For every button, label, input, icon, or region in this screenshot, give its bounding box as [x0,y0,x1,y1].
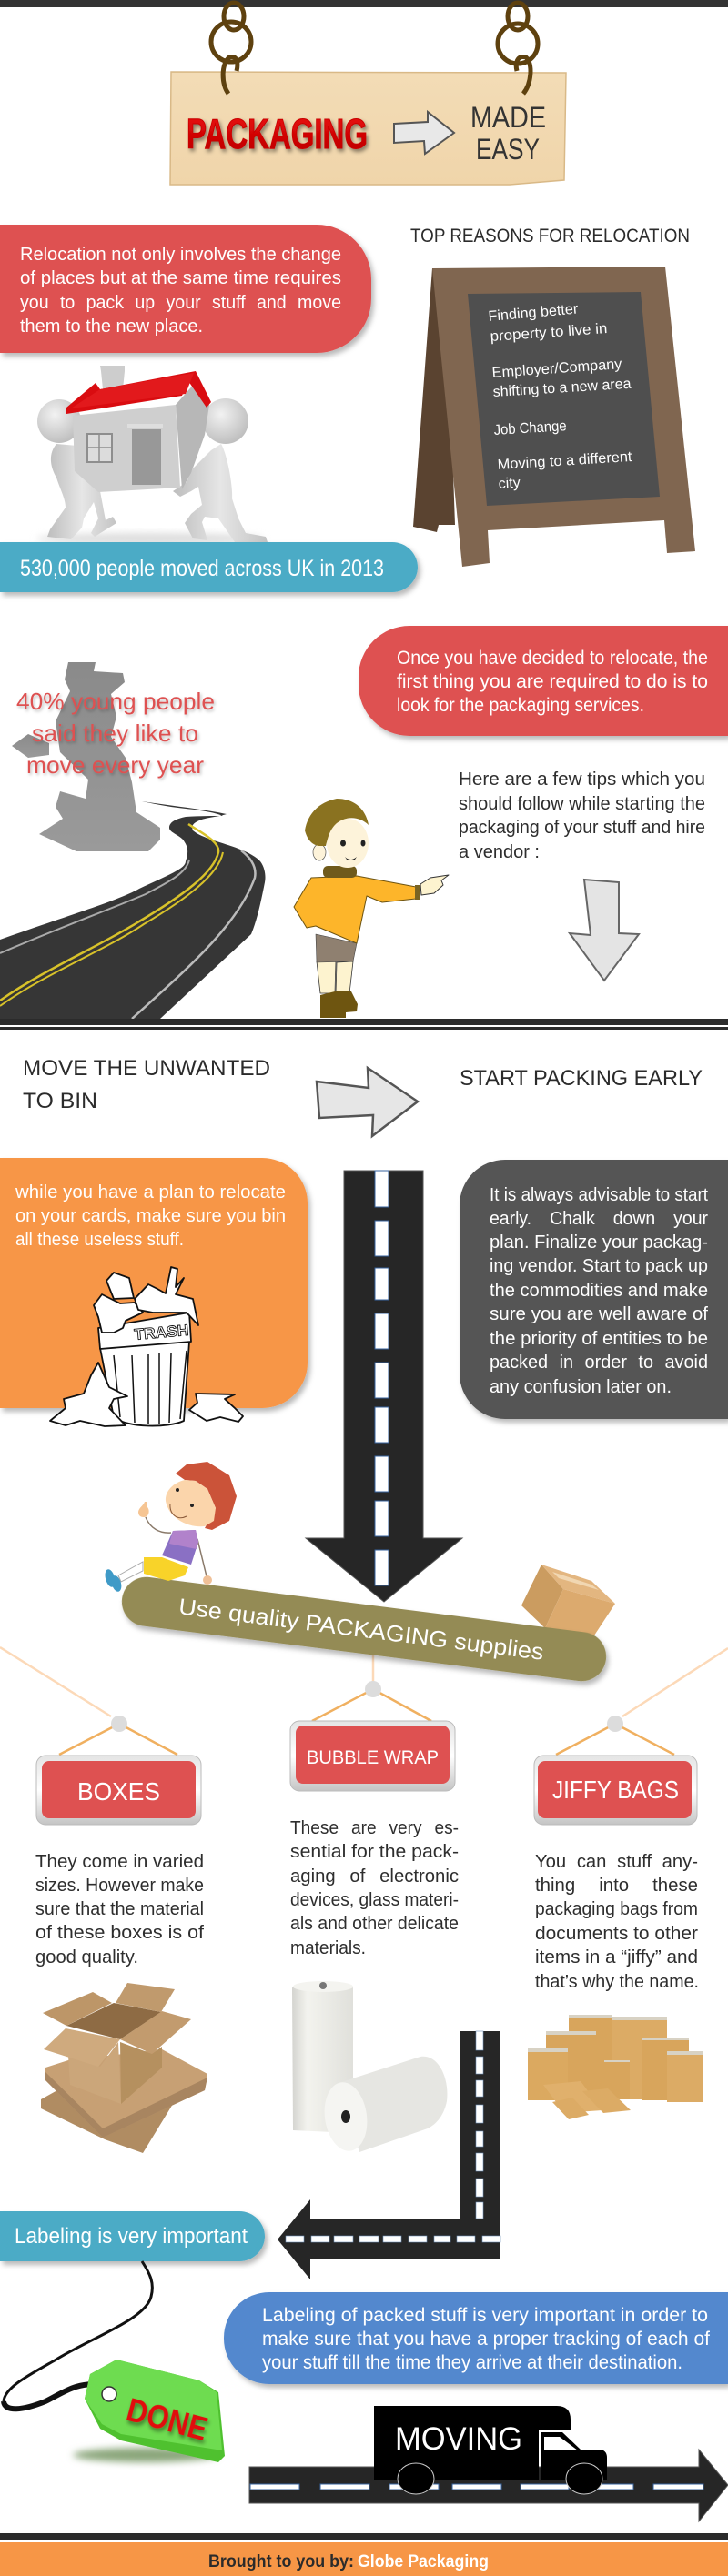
tag with cord [4,2261,225,2462]
red plate [42,1761,196,1818]
red plate [296,1726,450,1784]
reasons text: Moving to a different [497,449,633,473]
house front [73,405,180,492]
reasons text: shifting to a new area [492,377,632,400]
callout: relocation intro: you to pack up your stuff and move [20,293,341,313]
can ribs [114,1351,187,1424]
road arrow: down [306,1171,462,1602]
reasons text: Job Change [493,418,567,438]
panel: start packing early: ing vendor. Start to pack up [490,1256,708,1276]
illustration: boy pointing [294,799,449,1018]
callout: labeling detail: make sure that you have a proper tracking of each of [262,2329,710,2350]
pin [111,1716,127,1732]
callout: look for packaging services [359,626,728,736]
callout: look for packaging services: look for the packaging services. [397,695,644,716]
tag body [85,2360,225,2462]
face [166,1480,216,1526]
rear wheel [566,2463,602,2494]
cab window [544,2437,578,2450]
callout: labeling detail: Labeling of packed stuff is very important in order to [262,2305,708,2326]
red roof [66,371,211,414]
rubbish on the ground left [50,1363,127,1426]
carton [106,1273,134,1299]
panel: start packing early: any confusion later on. [490,1377,672,1397]
text: tips intro: packaging of your stuff and hire [459,817,705,838]
stat bar: people moved [0,542,418,592]
heading: move the unwanted to bin [23,1056,270,1113]
box back interior [66,2003,161,2039]
banner: quality packaging supplies [119,1575,609,1684]
text: jiffy bags: packaging bags from [535,1899,698,1919]
label bar: labeling is very important [0,2211,265,2261]
right figure head [203,398,248,444]
sketch arrow right [317,1068,418,1136]
hanging title sign [170,3,566,185]
sign board [170,72,566,185]
callout: relocation intro: of places but at the same time requires [20,268,341,288]
MOVING: MOVING [395,2421,522,2457]
wooden frame [432,267,695,567]
illustration: jiffy bags [528,2015,703,2119]
reasons text: city [498,476,521,492]
hanging strings [556,1724,674,1755]
text: jiffy bags: items in a “jiffy” and [535,1947,698,1967]
road lane lines [0,824,218,1001]
label: BOXES [77,1777,160,1806]
footer: Globe Packaging [358,2552,489,2571]
panel: move to bin: on your cards, make sure you bin [15,1206,286,1226]
winding road [0,801,265,1019]
metal frame [36,1756,201,1825]
text: jiffy bags: You can stuff any- [535,1852,698,1872]
text: boxes: sizes. However make [35,1876,204,1896]
horizontal dashes [286,2236,500,2242]
callout: look for packaging services: first thing you are required to do is to [397,671,708,692]
sign: bubble wrap [290,1681,455,1791]
heading: move the unwanted to bin: TO BIN [23,1089,97,1113]
window [87,434,112,462]
box right face [120,2042,162,2104]
text: boxes: They come in varied [35,1852,204,1872]
sketch arrow right [394,112,454,154]
text: bubble wrap: materials. [290,1938,366,1958]
books on the ground right [189,1394,243,1422]
panel: start packing early: It is always advisable to start [490,1185,708,1205]
callout: relocation intro: them to the new place. [20,317,203,337]
left flap [43,1992,112,2026]
shorts [316,934,357,962]
label bar: labeling is very important: Labeling is very important [15,2224,248,2249]
panel: move to bin: all these useless stuff. [15,1230,184,1250]
boots [320,991,358,1018]
lane dashes [250,2484,703,2490]
cab [541,2432,607,2480]
heading: start packing early: START PACKING EARLY [460,1066,703,1091]
reasons text: property to live in [490,321,608,345]
pointing hand [420,875,449,895]
text: jiffy bags: documents to other [535,1924,698,1944]
text: boxes [35,1852,204,1967]
text: bubble wrap: devices, glass materi- [290,1890,459,1910]
right chain [498,3,538,94]
text: bubble wrap: These are very es- [290,1818,459,1838]
footer: Brought to you by: [208,2552,354,2571]
moving truck [374,2406,607,2494]
roll end [320,2079,371,2154]
text: bubble wrap [290,1818,459,1958]
horizontal roll body [339,2057,447,2152]
panel: move to bin [0,1158,308,1408]
box left face [68,2042,121,2104]
text: tips intro: should follow while starting the [459,793,705,814]
banner: quality packaging supplies: Use quality PACKAGING supplies [177,1594,545,1665]
illustration: cardboard boxes [41,1983,207,2153]
MADE EASY: MADE [470,101,546,134]
MADE EASY [470,101,546,166]
text: jiffy bags: that’s why the name. [535,1972,699,1992]
pin [607,1716,623,1732]
front flap [44,2028,120,2067]
string to signs [0,1647,728,1716]
facial features [340,840,366,860]
house side wall [176,382,209,489]
shorts [144,1557,188,1581]
slate [468,292,660,506]
stat: 40% young people: said they like to [32,719,198,747]
collar [323,866,357,878]
text: boxes: good quality. [35,1947,138,1967]
right flap [120,2011,191,2054]
red plate [538,1761,692,1818]
hanging strings [312,1689,431,1721]
hair [305,799,369,846]
panel: start packing early: early. Chalk down your [490,1209,708,1229]
door header [127,424,163,428]
left figure head [37,399,81,443]
sketch arrow down [570,880,639,981]
heading: top reasons: TOP REASONS FOR RELOCATION [410,226,690,247]
panel: move to bin: while you have a plan to relocate [15,1182,286,1202]
sign: jiffy bags [534,1716,697,1825]
crumpled paper left [94,1294,143,1333]
left figure body [47,444,116,539]
PACKAGING wordmark: PACKAGING [187,110,368,157]
text: jiffy bags [535,1852,699,1992]
sign: boxes [36,1716,201,1825]
panel: start packing early [460,1160,728,1419]
label: JIFFY BAGS [552,1776,679,1804]
text: boxes: of these boxes is of [35,1923,204,1943]
smile [170,1504,187,1518]
panel: start packing early: the priority of entities to be [490,1329,708,1349]
right figure body [173,444,268,542]
callout: labeling detail [224,2292,728,2384]
chalkboard with reasons [413,267,695,567]
shoes [104,1568,123,1593]
seal strips [528,2015,703,2062]
stat: 40% young people [16,688,215,779]
metal frame [290,1721,455,1791]
reasons text: Employer/Company [491,357,622,381]
DONE: DONE [123,2390,211,2448]
tag shadow [73,2448,218,2462]
road arrow: L-shaped left [278,2031,500,2279]
illustration: cardboard box [521,1565,615,1635]
text: boxes: sure that the material [35,1899,204,1919]
sweater cuff [415,885,420,900]
can rim [98,1313,191,1349]
hanging strings [59,1724,177,1755]
illustration: trash can [50,1267,243,1426]
door [132,429,161,485]
top flat stack [46,2049,207,2138]
text: tips intro [459,769,705,862]
road arrow: right [249,2450,728,2521]
legs [317,961,353,993]
illustration: figures carrying house [36,366,268,544]
panel: start packing early: the commodities and make [490,1281,708,1301]
top papers [135,1267,198,1325]
reasons text: Finding better [488,301,580,325]
footer [0,2542,728,2576]
MADE EASY: EASY [476,133,540,166]
flat stack edge [46,2072,207,2138]
illustration: sitting kid [104,1462,237,1593]
text: bubble wrap: aging of electronic [290,1867,459,1887]
panel: start packing early: sure you are well aware of [490,1304,708,1324]
UK map [12,662,160,851]
stat bar: people moved: 530,000 people moved across UK in 2013 [20,556,384,581]
back flap [116,1983,175,2012]
vertical roll [292,1981,353,2133]
vertical dashes [476,2031,483,2219]
heading: move the unwanted to bin: MOVE THE UNWANTED [23,1056,270,1081]
thick cord [4,2384,102,2409]
callout: relocation intro [0,225,371,353]
shirt [162,1530,198,1565]
ear [313,844,326,860]
eyes [176,1488,194,1507]
callout: relocation intro: Relocation not only involves the change [20,245,341,265]
label: BUBBLE WRAP [307,1747,439,1768]
pin [365,1681,381,1697]
ground shadow [36,533,264,544]
text: tips intro: a vendor : [459,841,540,862]
metal frame [534,1756,697,1825]
cargo box [374,2406,571,2480]
text: jiffy bags: thing into these [535,1876,698,1896]
reasons text [488,301,633,492]
packing tape [552,1572,599,1590]
callout: labeling detail: your stuff till the time they arrive at their destination. [262,2352,682,2373]
front wheel [398,2463,434,2494]
leg [118,1562,143,1582]
bottom flat stack [41,2090,173,2153]
can body [100,1342,189,1426]
face [327,819,369,868]
panel: start packing early: packed in order to avoid [490,1353,708,1373]
text: bubble wrap: als and other delicate [290,1914,459,1934]
left chain [211,3,251,94]
raised arm [146,1517,171,1533]
text: bubble wrap: sential for the pack- [290,1842,459,1862]
panel: start packing early: plan. Finalize your packag- [490,1233,708,1253]
thin cord [4,2261,152,2401]
lane dashes [375,1171,389,1585]
tag hole [102,2387,116,2401]
raised hand [138,1502,149,1517]
chimney [100,366,125,389]
callout: look for packaging services: Once you have decided to relocate, the [397,648,708,669]
resting hand [203,1575,212,1585]
stat: 40% young people: 40% young people [16,688,215,715]
hair [176,1462,237,1530]
sweater [294,876,416,943]
stat: 40% young people: move every year [26,751,204,779]
back leg [413,268,455,532]
text: tips intro: Here are a few tips which you [459,769,705,790]
resting arm [197,1539,207,1576]
top bar [0,0,728,7]
illustration: foam rolls [292,1981,447,2154]
trash label: TRASH [134,1322,189,1343]
